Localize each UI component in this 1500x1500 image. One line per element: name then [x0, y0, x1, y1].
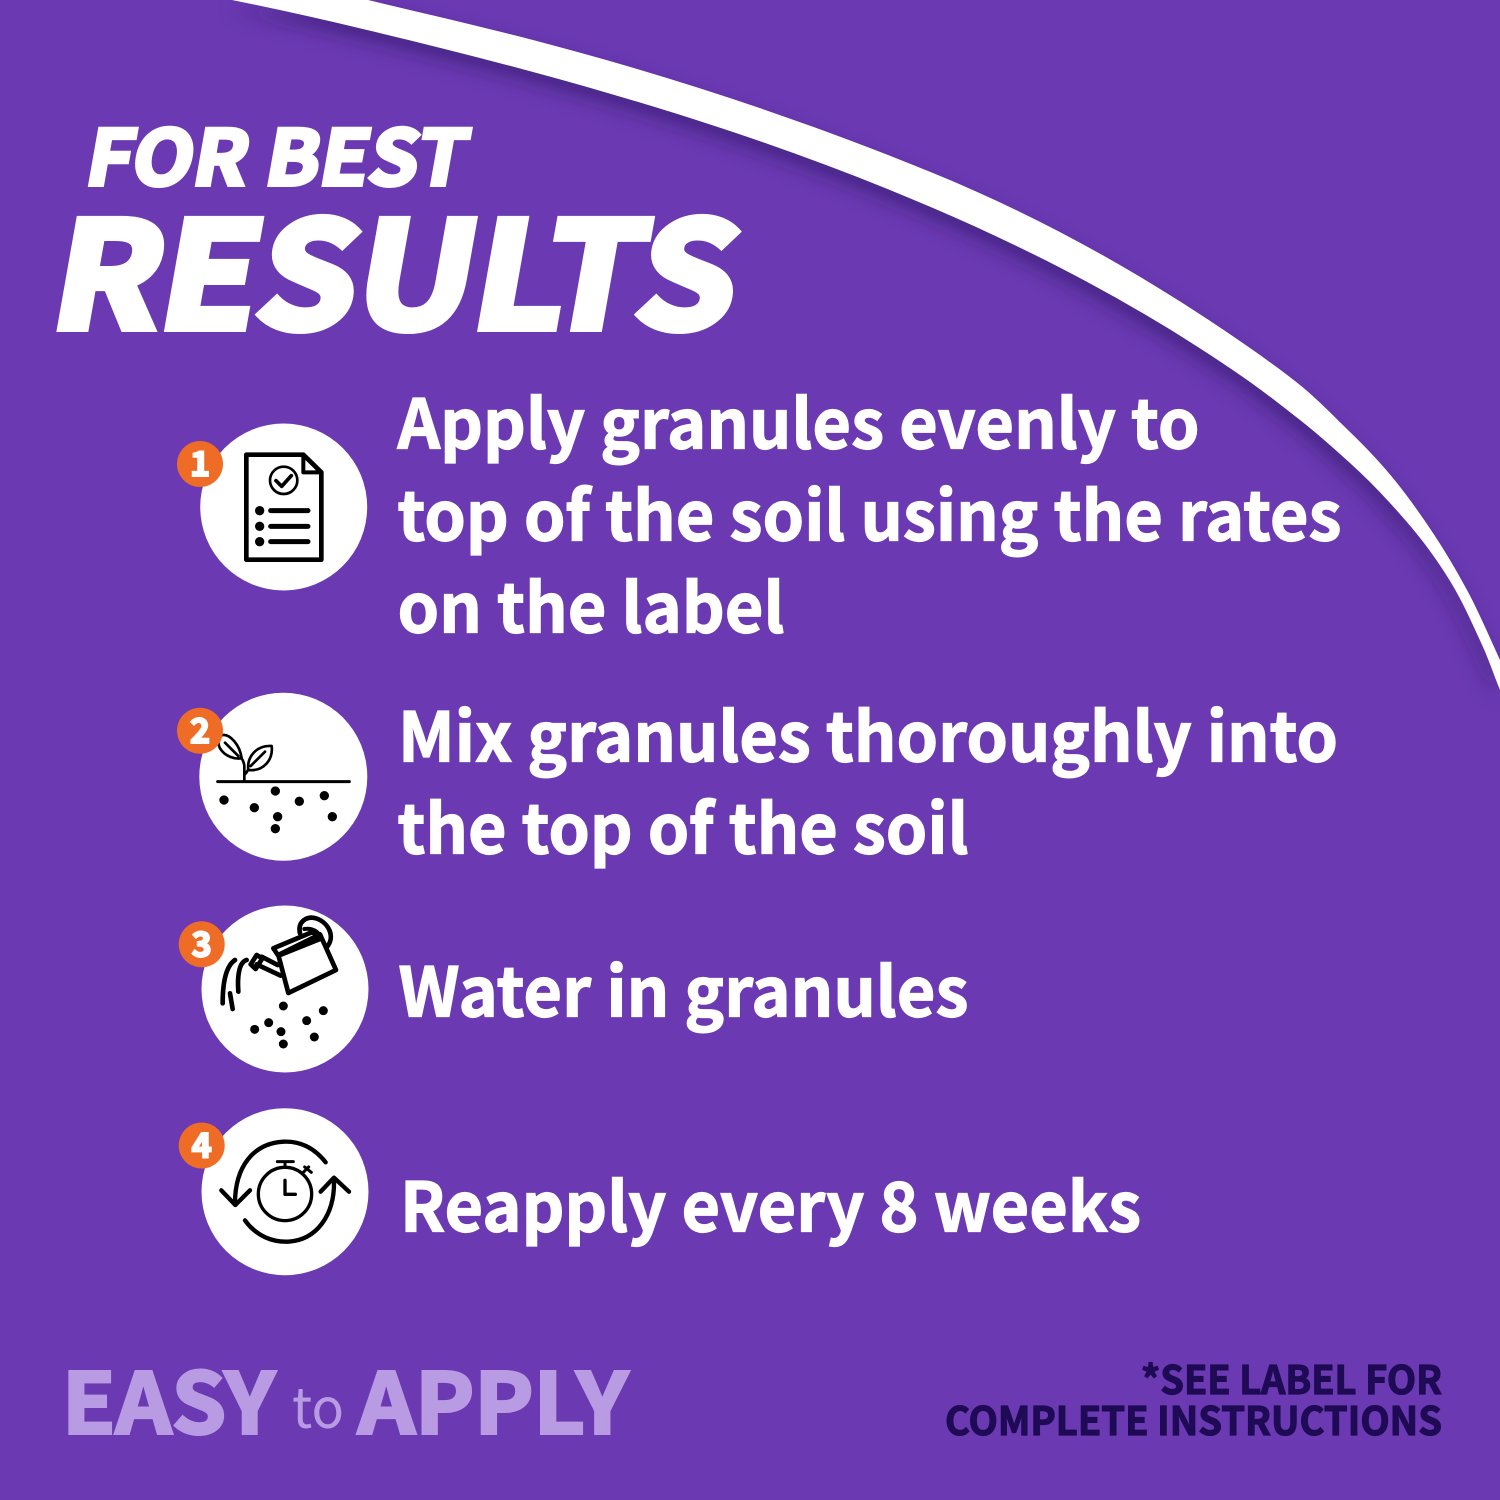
step 3 badge: 3 [192, 918, 212, 966]
step 1 text: on the label [398, 554, 784, 652]
step 1 icon: checklist document [200, 424, 367, 590]
step 1 text [397, 370, 1341, 652]
step 1 badge [177, 437, 223, 487]
step 2 icon: seedling and granules in soil [199, 693, 367, 861]
easy to apply tagline: APPLY [357, 1338, 629, 1458]
swoosh shadow [227, 9, 1495, 699]
step 3 icon: watering can and granules [202, 906, 368, 1072]
label footnote: *SEE LABEL FOR [1141, 1350, 1442, 1406]
step 4 badge [179, 1118, 225, 1168]
step 1 text: top of the soil using the rates [398, 462, 1342, 560]
title: RESULTS [39, 159, 759, 371]
step 3 text: Water in granules [398, 938, 968, 1036]
label footnote [945, 1350, 1442, 1447]
step 2 badge: 2 [190, 704, 210, 753]
step 1 text: Apply granules evenly to [397, 370, 1199, 468]
step 2 text [398, 682, 1338, 874]
step 2 text: the top of the soil [398, 774, 968, 874]
step 1 badge: 1 [190, 437, 210, 486]
title: FOR BEST [79, 98, 478, 208]
easy to apply tagline [62, 1338, 629, 1458]
easy to apply tagline: EASY [62, 1338, 276, 1458]
label footnote: COMPLETE INSTRUCTIONS [945, 1391, 1442, 1447]
easy to apply tagline: to [292, 1364, 344, 1445]
step 2 badge [177, 704, 223, 754]
step 4 icon: stopwatch with cycle arrows [202, 1108, 368, 1275]
step 3 badge [179, 918, 225, 967]
white swoosh [232, 0, 1500, 690]
step 4 text: Reapply every 8 weeks [400, 1152, 1141, 1252]
step 2 text: Mix granules thoroughly into [398, 682, 1338, 782]
step 4 badge: 4 [192, 1118, 212, 1168]
